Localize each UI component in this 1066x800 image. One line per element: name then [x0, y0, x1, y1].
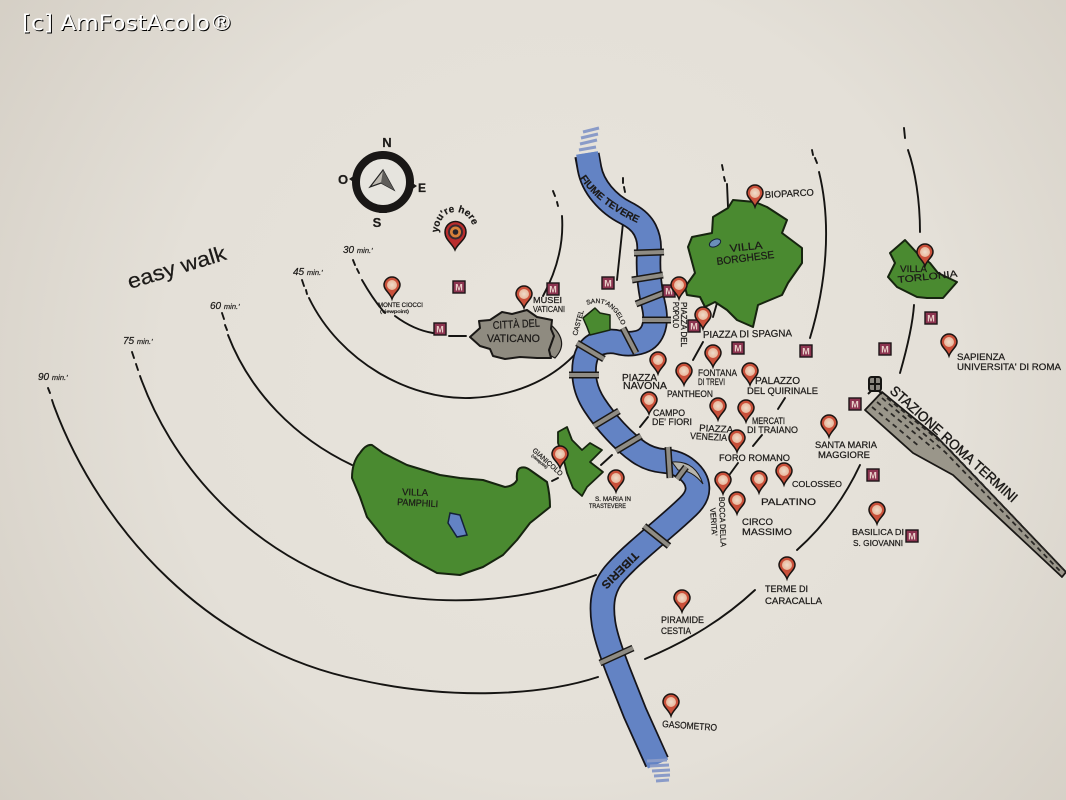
place: Terme di Caracalla: [765, 557, 822, 606]
60 minute arc: [222, 165, 728, 481]
place: Santa Maria Maggiore: SANTA MARIA: [815, 440, 877, 450]
place: Fontana di Trevi: DI TREVI: [698, 377, 725, 388]
place: Piazza Navona: [622, 352, 667, 392]
place: Pantheon: [667, 363, 713, 400]
90 minute arc: [48, 128, 920, 693]
park: Villa Pamphili: [352, 445, 550, 575]
place: S. Maria in Trastevere: TRASTEVERE: [589, 503, 627, 510]
place: Bocca della Verità: VERITA': [708, 508, 719, 537]
place: Foro Romano: [719, 430, 790, 464]
place: Monte Ciocci: (viewpoint): [380, 309, 410, 314]
compass: [338, 135, 426, 230]
place: Piramide Cestia: CESTIA: [661, 626, 691, 636]
walking distance arcs: [48, 128, 920, 693]
place: Piazza Venezia: PIAZZA: [699, 423, 734, 436]
park: Villa Torlonia: TORLONIA: [897, 269, 959, 286]
place: Santa Maria Maggiore: [815, 415, 877, 460]
river body fill: [584, 153, 698, 764]
icon: train: [868, 377, 882, 394]
place: Piazza del Popolo: PIAZZA DEL: [679, 302, 688, 348]
park: Villa Borghese: VILLA: [729, 240, 763, 255]
park: Gianicolo: [558, 427, 603, 496]
place: Circo Massimo: [729, 492, 792, 538]
place: Piazza del Popolo: POPOLO: [671, 302, 680, 328]
place: Terme di Caracalla: TERME DI: [765, 584, 808, 594]
park: Villa Borghese: BORGHESE: [716, 249, 775, 268]
place: Palazzo del Quirinale: [742, 363, 818, 397]
place: Mercati di Traiano: [738, 400, 798, 436]
place: Piazza del Popolo: [671, 277, 688, 348]
label: 75 min: 75 min.': [123, 336, 153, 347]
Vatican City: CITTÀ DEL: [492, 317, 540, 332]
you're here pin: you're here: [432, 205, 477, 233]
place: Colosseo: COLOSSEO: [792, 479, 842, 489]
compass: O: [338, 172, 348, 187]
place: Pantheon: PANTHEON: [667, 389, 713, 400]
place: Mercati di Traiano: MERCATI: [752, 416, 785, 427]
place: Palatino: PALATINO: [761, 497, 816, 508]
place: Gianicolo: GIANICOLO: [531, 447, 564, 478]
place: Torlonia pin: [917, 244, 933, 266]
you're here pin: [432, 205, 477, 252]
place: Campo de' Fiori: CAMPO: [653, 408, 685, 419]
place: Fontana di Trevi: FONTANA: [698, 368, 738, 379]
place: Bioparco: [747, 185, 814, 207]
compass: E: [418, 181, 426, 195]
place: Sapienza: UNIVERSITA' DI ROMA: [957, 362, 1061, 372]
place: Bocca della Verità: BOCCA DELLA: [717, 497, 728, 548]
river source ticks: [578, 128, 599, 156]
bridges: [569, 252, 686, 663]
Termini station: [865, 377, 1066, 577]
place: Basilica di S. Giovanni: S. GIOVANNI: [853, 538, 903, 548]
30 minute arc: [353, 191, 562, 336]
place: Campo de' Fiori: [641, 392, 692, 428]
watermark: [c] AmFostAcolo®: [23, 12, 234, 36]
place: Piazza Navona: NAVONA: [623, 381, 667, 392]
river mouth ticks: [647, 760, 670, 781]
place: Colosseo: [776, 463, 842, 489]
compass: S: [373, 215, 382, 230]
place: Campo de' Fiori: DE' FIORI: [652, 417, 692, 428]
place: Sapienza: [941, 334, 1061, 372]
time labels: [38, 245, 373, 383]
park: Villa Borghese: [685, 200, 802, 327]
place: S. Maria in Trastevere: [589, 470, 631, 510]
place: Fontana di Trevi: [698, 345, 738, 388]
label: 45 min: 45 min.': [293, 267, 323, 278]
place: Palatino: [751, 471, 816, 508]
place: Palazzo del Quirinale: PALAZZO: [755, 376, 800, 387]
park: Castel Sant'Angelo: SANT'ANGELO: [586, 298, 626, 324]
place: Palazzo del Quirinale: DEL QUIRINALE: [747, 386, 818, 397]
place: Terme di Caracalla: CARACALLA: [765, 596, 822, 606]
compass: N: [382, 135, 392, 150]
place: Basilica di S. Giovanni: [852, 502, 904, 548]
place: Piazza Venezia: VENEZIA: [690, 431, 728, 444]
place: Piazza di Spagna: [695, 307, 792, 341]
river body outline: [584, 155, 698, 762]
park: Villa Torlonia: VILLA: [900, 264, 928, 275]
park: Villa Pamphili: VILLA: [402, 487, 429, 499]
park: Villa Torlonia: [888, 240, 959, 298]
Tiber Island: [672, 462, 703, 484]
75 minute arc: [132, 150, 826, 600]
place: Foro Romano: FORO ROMANO: [719, 453, 790, 464]
place: Santa Maria Maggiore: MAGGIORE: [818, 450, 870, 460]
park: Castel Sant'Angelo: CASTEL: [572, 309, 586, 337]
place: Piazza di Spagna: PIAZZA DI SPAGNA: [703, 328, 792, 341]
river Tiber: [569, 126, 710, 782]
place: Piramide Cestia: [661, 590, 704, 636]
place: Piramide Cestia: PIRAMIDE: [661, 615, 704, 625]
place: Circo Massimo: CIRCO: [742, 517, 773, 528]
label: 90 min: 90 min.': [38, 372, 68, 383]
place: Piazza Navona: PIAZZA: [622, 373, 657, 384]
label: 30 min: 30 min.': [343, 245, 373, 256]
label: Tiberis: TIBERIS: [598, 549, 640, 591]
place: Basilica di S. Giovanni: BASILICA DI: [852, 527, 904, 537]
park: Villa Pamphili: PAMPHILI: [397, 497, 438, 510]
place: Piazza Venezia: [690, 398, 734, 444]
place: Sapienza: SAPIENZA: [957, 352, 1005, 362]
watermark: [c] AmFostAcolo®: [22, 11, 233, 35]
place: Monte Ciocci: [378, 277, 423, 314]
place: Bioparco: BIOPARCO: [765, 187, 814, 201]
park: Castel Sant'Angelo: [572, 298, 626, 337]
place: Circo Massimo: MASSIMO: [742, 527, 792, 538]
label: 60 min: 60 min.': [210, 301, 240, 312]
place: Gasometro: [662, 694, 717, 734]
place: Bocca della Verità: [708, 472, 731, 548]
place: Musei Vaticani: MUSEI: [533, 296, 562, 305]
title: easy walk: easy walk: [125, 242, 230, 294]
place: S. Maria in Trastevere: S. MARIA IN: [595, 496, 631, 503]
label: Fiume Tevere: FIUME TEVERE: [580, 174, 640, 223]
place: Musei Vaticani: [516, 286, 565, 314]
place: Gianicolo: (viewpoint): [530, 453, 549, 470]
Vatican City: [470, 310, 562, 359]
place: Mercati di Traiano: DI TRAIANO: [747, 425, 798, 436]
45 minute arc: [302, 178, 625, 398]
place: Gasometro: GASOMETRO: [662, 719, 717, 734]
Vatican City: VATICANO: [487, 333, 540, 345]
place: Musei Vaticani: VATICANI: [533, 305, 565, 314]
metro markers: [434, 277, 937, 542]
label: Stazione Roma Termini: STAZIONE ROMA TERMINI: [887, 382, 1021, 505]
place: Monte Ciocci: MONTE CIOCCI: [378, 303, 423, 309]
